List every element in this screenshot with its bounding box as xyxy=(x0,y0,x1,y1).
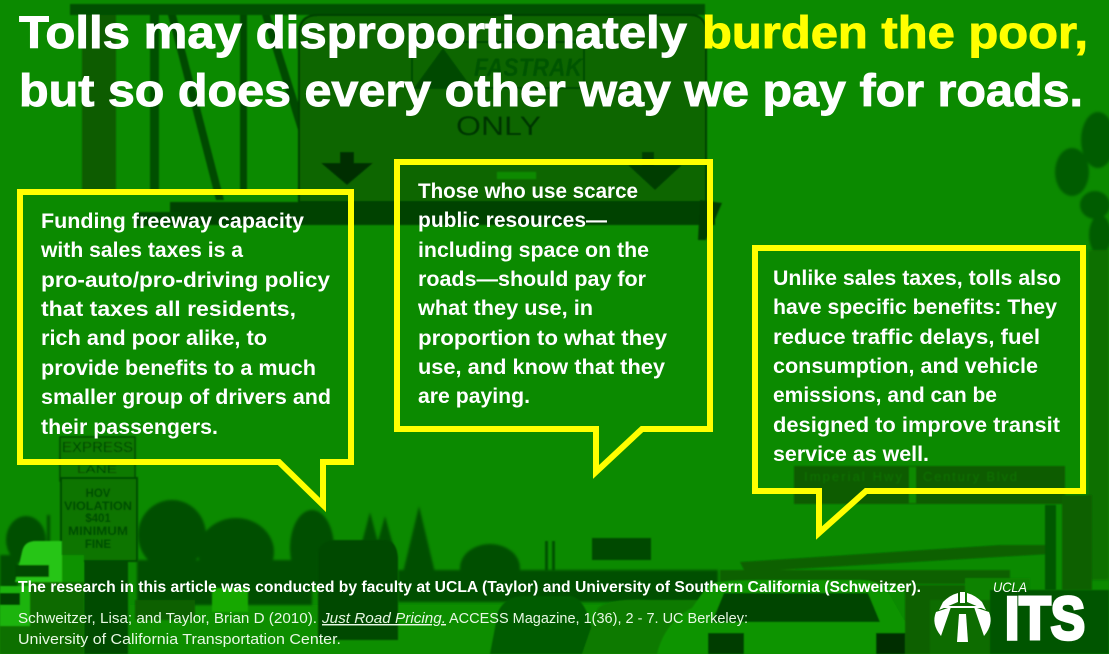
callout: sales taxes: that taxes all residents, xyxy=(41,298,296,321)
callout: specific benefits of tolls: consumption, and vehicle xyxy=(773,355,1038,378)
callout: sales taxes: provide benefits to a much xyxy=(41,357,316,380)
express lane and HOV violation signs: VIOLATION xyxy=(64,501,132,513)
callout: sales taxes: pro-auto/pro-driving policy xyxy=(41,269,330,292)
gantry with FasTrak sign: FASTRAK xyxy=(474,54,584,82)
express lane and HOV violation signs: EXPRESS xyxy=(62,439,133,456)
callout: specific benefits of tolls: service as well. xyxy=(773,443,929,466)
express lane and HOV violation signs: $401 xyxy=(85,513,111,525)
callout: pay for what they use: are paying. xyxy=(418,385,530,408)
title: burden the poor, xyxy=(702,7,1088,58)
callout: pay for what they use: use, and know that they xyxy=(418,356,665,379)
trees upper right xyxy=(1055,112,1109,580)
Imperial Hwy overhead sign: Century Blvd xyxy=(923,469,1017,484)
callout: pay for what they use: public resources— xyxy=(418,209,607,232)
gantry with FasTrak sign xyxy=(70,4,722,240)
Imperial Hwy overhead sign xyxy=(794,466,1092,590)
express lane and HOV violation signs: HOV xyxy=(86,488,111,500)
callout: sales taxes: their passengers. xyxy=(41,416,218,439)
citation: ACCESS Magazine, 1(36), 2 - 7. UC Berkeley: xyxy=(449,611,748,627)
citation: Schweitzer, Lisa; and Taylor, Brian D (2010). xyxy=(18,611,317,627)
callout: pay for what they use: proportion to what they xyxy=(418,327,667,350)
callout: sales taxes: Funding freeway capacity xyxy=(41,210,304,233)
callout: sales taxes: smaller group of drivers and xyxy=(41,386,331,409)
logo: UCLA ITS xyxy=(934,579,1085,652)
trucks at left xyxy=(0,541,248,654)
callout: pay for what they use: roads—should pay for xyxy=(418,268,646,291)
traffic cars xyxy=(490,578,1109,654)
express lane and HOV violation signs: LANE xyxy=(77,464,117,476)
express lane and HOV violation signs: FINE xyxy=(85,539,111,551)
callout: sales taxes: with sales taxes is a xyxy=(40,239,243,262)
callout: specific benefits of tolls xyxy=(755,248,1083,533)
express lane and HOV violation signs xyxy=(60,437,137,654)
title: Tolls may disproportionately xyxy=(19,7,687,58)
title: but so does every other way we pay for roads. xyxy=(19,65,1083,116)
callout: pay for what they use: what they use, in xyxy=(417,297,593,320)
callout: specific benefits of tolls: designed to improve transit xyxy=(773,414,1060,437)
callout: specific benefits of tolls: have specific benefits: They xyxy=(773,296,1057,319)
callout: pay for what they use: including space on the xyxy=(418,239,649,262)
title xyxy=(19,7,1088,116)
citation: University of California Transportation Center. xyxy=(18,632,341,648)
logo: UCLA ITS: UCLA xyxy=(993,579,1027,595)
callout: pay for what they use xyxy=(397,162,710,472)
callout: sales taxes xyxy=(20,192,351,505)
road surface xyxy=(130,605,730,654)
callout: specific benefits of tolls: Unlike sales taxes, tolls also xyxy=(773,267,1061,290)
bus xyxy=(318,540,398,640)
far gantry and overpass xyxy=(545,538,1050,584)
Imperial Hwy overhead sign: Imperial Hwy xyxy=(804,469,902,484)
callout: sales taxes: rich and poor alike, to xyxy=(41,327,267,350)
callout: pay for what they use: Those who use scarce xyxy=(418,180,638,203)
tree line xyxy=(0,500,718,605)
callout: specific benefits of tolls: emissions, and can be xyxy=(773,384,997,407)
icon: road emblem xyxy=(934,592,991,642)
citation xyxy=(18,611,748,648)
gantry with FasTrak sign: ONLY xyxy=(456,111,541,141)
callout: specific benefits of tolls: reduce traffic delays, fuel xyxy=(773,326,1040,349)
citation: Just Road Pricing. xyxy=(321,611,446,627)
logo: UCLA ITS: ITS xyxy=(1005,585,1085,652)
express lane and HOV violation signs: MINIMUM xyxy=(68,526,128,538)
research note: The research in this article was conducted by faculty at UCLA (Taylor) and University of Southern California (Schweitzer). xyxy=(18,579,921,596)
